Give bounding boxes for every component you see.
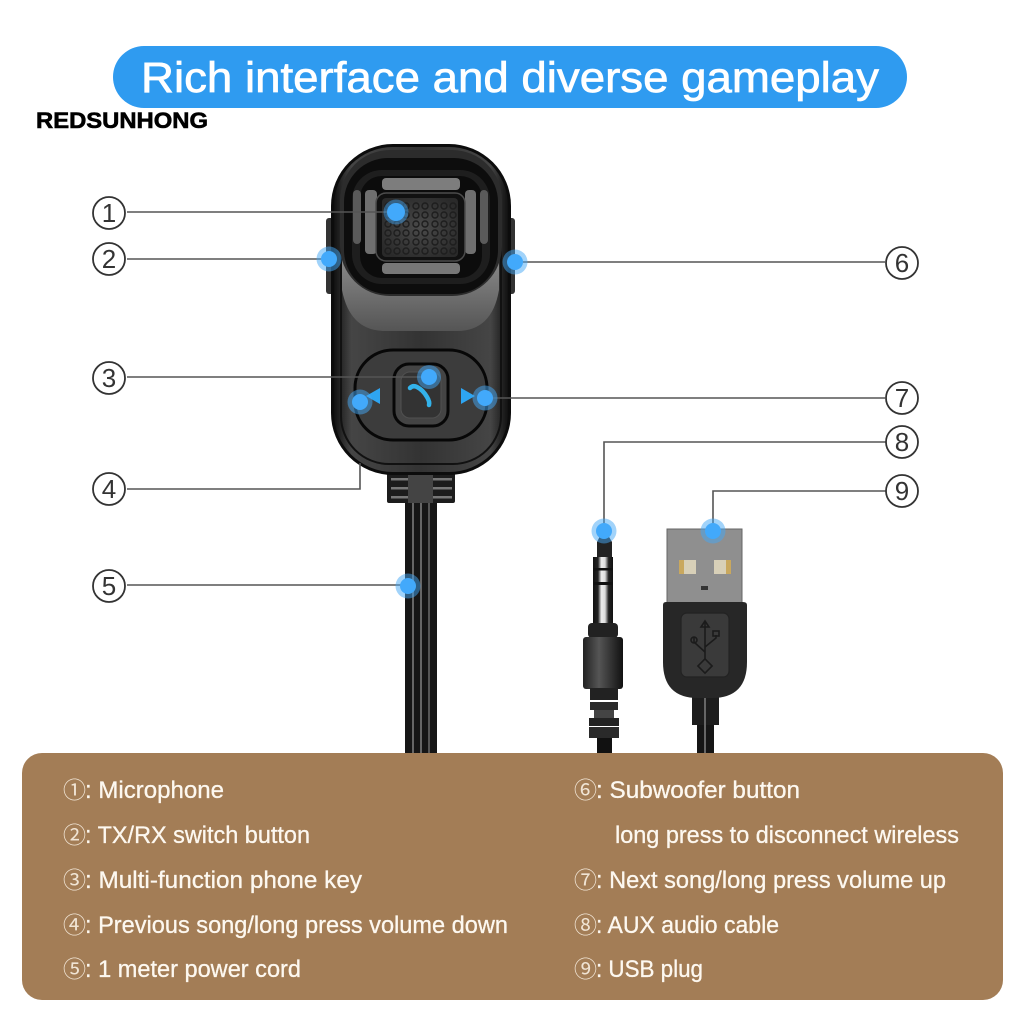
legend: right column: : AUX audio cable: [596, 912, 779, 939]
device: phone icon: [410, 386, 429, 405]
legend: right column: ⑥: [574, 777, 597, 803]
legend: left column: : Multi-function phone key: [85, 867, 362, 894]
legend: left column: : Previous song/long press volume down: [85, 912, 508, 939]
legend: left column: ⑤: [63, 956, 86, 982]
legend: right column: ⑨: [574, 956, 597, 982]
legend: right column: [574, 777, 959, 983]
legend: right column: : Next song/long press volume up: [596, 867, 946, 894]
number badges: right: 8: [895, 427, 909, 457]
number badges: left: 1: [102, 198, 116, 228]
number badges: left: 5: [102, 571, 116, 601]
legend: left column: ③: [63, 867, 86, 893]
device: button panel: [355, 350, 487, 440]
legend: left column: ②: [63, 822, 86, 848]
number badges: right: 7: [895, 383, 909, 413]
legend: right column: : Subwoofer button: [596, 777, 800, 804]
legend: left column: ①: [63, 777, 86, 803]
USB overmold: [663, 602, 747, 698]
device: microphone mesh: [382, 198, 458, 257]
device: rubber pads: [382, 178, 460, 190]
AUX audio cable: [583, 528, 623, 754]
arrow icons: [366, 388, 475, 404]
USB metal shell: [667, 529, 742, 605]
USB trident symbol: [691, 621, 719, 673]
device: remote body: [326, 144, 515, 475]
legend: right column: : USB plug: [596, 956, 703, 983]
number badges: left: 2: [102, 244, 116, 274]
legend: left column: : 1 meter power cord: [85, 956, 301, 983]
USB plug: [663, 529, 747, 755]
AUX plug tip: [597, 528, 612, 558]
number badges: right: [886, 247, 918, 507]
device: phone key: [394, 364, 448, 426]
legend: left column: [63, 777, 508, 983]
legend: left column: : Microphone: [85, 777, 224, 804]
number badges: right: 9: [895, 476, 909, 506]
legend: right column: long press to disconnect wireless: [615, 822, 959, 849]
device: strain relief: [387, 470, 455, 503]
legend: right column: ⑧: [574, 912, 597, 938]
number badges: left: 3: [102, 363, 116, 393]
legend panel: [22, 753, 1003, 1000]
device: microphone housing: [340, 150, 502, 296]
power cord: [405, 500, 437, 754]
legend: left column: ④: [63, 912, 86, 938]
number badges: left: 4: [102, 474, 116, 504]
device: lower bib highlight: [342, 255, 499, 331]
number badges: left: [93, 197, 125, 602]
legend: left column: : TX/RX switch button: [85, 822, 310, 849]
title banner: [113, 46, 907, 108]
callout marker dots: [316, 200, 726, 598]
AUX collar: [588, 623, 618, 638]
AUX strain relief: [590, 688, 618, 700]
legend: right column: ⑦: [574, 867, 597, 893]
title banner: Rich interface and diverse gameplay: [141, 54, 880, 102]
number badges: right: 6: [895, 248, 909, 278]
callout leader lines: [127, 212, 886, 585]
brand watermark: REDSUNHONG: [36, 108, 208, 133]
